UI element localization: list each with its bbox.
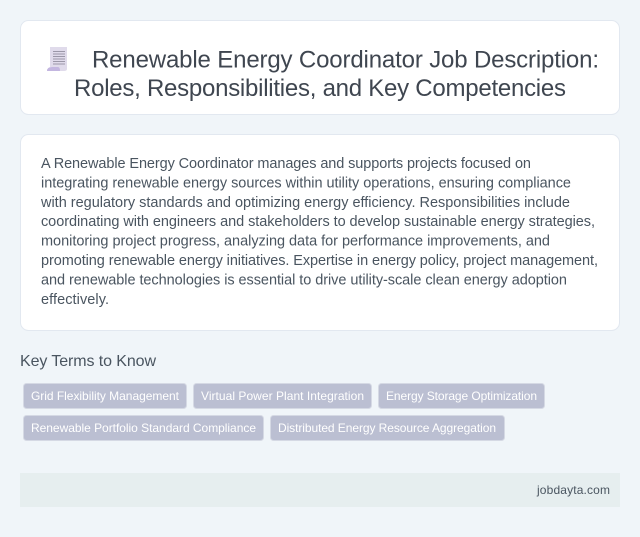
text block: description: with regulatory standards and optimizing energy efficiency. Responsibilities include — [40, 195, 570, 211]
icon: document scroll — [47, 47, 67, 71]
text block: description: monitoring project progress, analyzing data for performance improvements, and — [41, 234, 550, 250]
tag: virtual power plant integration: Virtual Power Plant Integration — [201, 389, 364, 403]
text block: description: coordinating with engineers and stakeholders to develop sustainable energy strategies, — [41, 214, 595, 230]
text block: description: A Renewable Energy Coordinator manages and supports projects focused on — [41, 156, 531, 172]
heading: key terms: Key Terms to Know — [20, 353, 156, 370]
tag: energy storage optimization — [378, 384, 544, 408]
title: Renewable Energy Coordinator Job Description: — [92, 46, 599, 74]
text block: description: integrating renewable energy sources within utility operations, ensuring compliance — [41, 175, 571, 191]
tag: virtual power plant integration — [194, 384, 372, 408]
tag: renewable portfolio standard compliance — [24, 416, 264, 440]
tag: grid flexibility management — [24, 384, 186, 408]
tag: energy storage optimization: Energy Storage Optimization — [386, 389, 537, 403]
title: Roles, Responsibilities, and Key Competencies — [74, 75, 566, 102]
text block: description: and renewable technologies is essential to drive utility-scale clean energy adoption — [41, 272, 567, 288]
tag: renewable portfolio standard compliance: Renewable Portfolio Standard Compliance — [31, 421, 256, 435]
panel: title card — [20, 20, 620, 114]
footer bar — [20, 473, 620, 507]
panel: description card — [20, 134, 620, 330]
text block: description: promoting renewable energy initiatives. Expertise in energy policy, project management, — [41, 253, 598, 269]
tag: grid flexibility management: Grid Flexibility Management — [31, 389, 180, 403]
text block: description: effectively. — [41, 292, 109, 308]
tag: distributed energy resource aggregation: Distributed Energy Resource Aggregation — [278, 421, 496, 435]
footer bar: jobdayta.com — [536, 483, 610, 497]
tag: distributed energy resource aggregation — [270, 416, 504, 440]
